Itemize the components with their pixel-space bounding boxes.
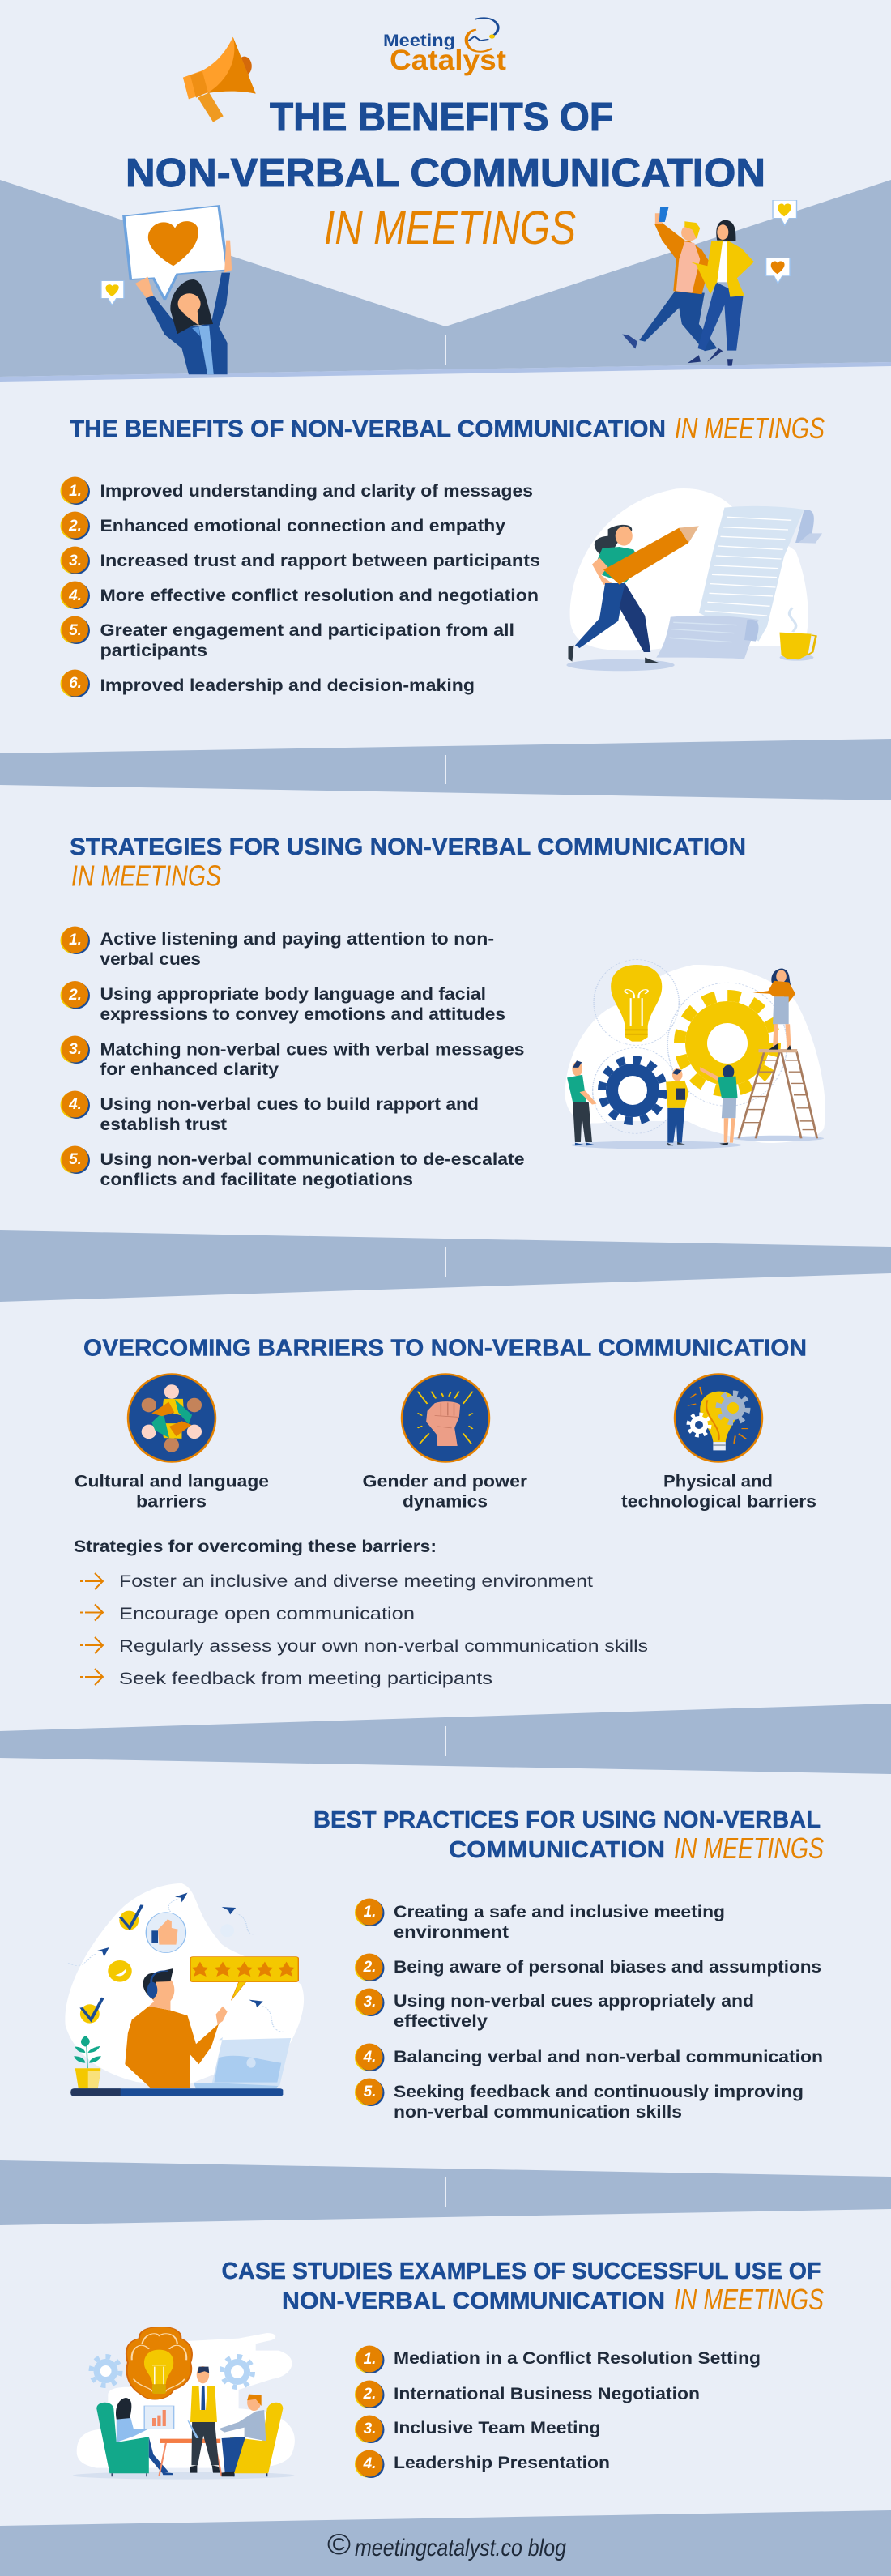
- heading: benefits: IN MEETINGS: [675, 412, 825, 445]
- divider band 2: [0, 1230, 891, 1302]
- list: best practices: effectively: [394, 2012, 488, 2031]
- panel: best practices: [65, 1807, 824, 2122]
- list: benefits: Enhanced emotional connection and empathy: [100, 517, 505, 535]
- illustration: team meeting with brain and bulb: [73, 2327, 295, 2480]
- list: case studies: 1.: [364, 2351, 376, 2368]
- list: benefits: 1.: [69, 483, 82, 500]
- heading: benefits: THE BENEFITS OF NON-VERBAL COMMUNICATION: [70, 416, 666, 442]
- list: case studies: Inclusive Team Meeting: [394, 2419, 601, 2437]
- heading: barriers: OVERCOMING BARRIERS TO NON-VERBAL COMMUNICATION: [83, 1335, 807, 1361]
- header band: [0, 180, 891, 382]
- list: benefits: Greater engagement and participation from all: [100, 621, 514, 640]
- list: strategies: Matching non-verbal cues with verbal messages: [100, 1040, 525, 1060]
- divider band 3: [0, 1704, 891, 1774]
- list: benefits: More effective conflict resolution and negotiation: [100, 586, 539, 605]
- list: strategies: establish trust: [100, 1115, 227, 1134]
- footer band: [0, 2510, 891, 2576]
- icon: yellow heart card: [773, 200, 797, 225]
- icon: small yellow heart card: [101, 281, 124, 305]
- heading: case studies: IN MEETINGS: [674, 2283, 824, 2316]
- list: strategies: Active listening and paying attention to non-: [100, 930, 494, 949]
- list: benefits: Increased trust and rapport between participants: [100, 552, 540, 570]
- list: benefits: Improved understanding and clarity of messages: [100, 482, 533, 501]
- heading: best practices: IN MEETINGS: [674, 1832, 824, 1865]
- panel: overcoming barriers: [74, 1335, 816, 1688]
- heading: case studies: [222, 2258, 824, 2316]
- title: [126, 96, 765, 254]
- footer credit: [327, 2527, 566, 2561]
- panel: benefits: [60, 412, 825, 697]
- list: benefits: 2.: [68, 518, 82, 535]
- list: overcoming strategies: [80, 1572, 648, 1688]
- list: benefits: [60, 476, 540, 697]
- heading: strategies: STRATEGIES FOR USING NON-VERBAL COMMUNICATION: [70, 834, 746, 860]
- heading: benefits: [70, 412, 825, 445]
- caption: physical and technological barriers: [621, 1473, 816, 1512]
- icon: orange heart card: [766, 258, 790, 284]
- icon: cultural and language barriers: [128, 1374, 215, 1461]
- heading: strategies: IN MEETINGS: [71, 859, 221, 893]
- list: strategies: 3.: [69, 1041, 82, 1058]
- divider band 1: [0, 739, 891, 800]
- heading: case studies: CASE STUDIES EXAMPLES OF SUCCESSFUL USE OF: [222, 2258, 821, 2284]
- list: best practices: 4.: [363, 2049, 376, 2066]
- illustration: woman with giant pencil and scroll: [566, 488, 822, 671]
- illustration: woman holding heart sign: [124, 206, 232, 374]
- list: best practices: 3.: [364, 1994, 376, 2011]
- title: IN MEETINGS: [324, 202, 576, 254]
- list: strategies: for enhanced clarity: [100, 1060, 279, 1079]
- panel: strategies: [60, 834, 825, 1189]
- list: benefits: 3.: [69, 552, 82, 569]
- list: best practices: [355, 1899, 823, 2122]
- list: best practices: Balancing verbal and non-verbal communication: [394, 2048, 823, 2066]
- caption: physical and technological barriers: technological barriers: [621, 1492, 816, 1512]
- caption: cultural and language barriers: Cultural and language: [75, 1473, 269, 1491]
- caption: gender and power dynamics: [363, 1473, 527, 1512]
- list: case studies: [355, 2346, 761, 2478]
- list: case studies: 3.: [364, 2420, 376, 2437]
- list: best practices: 2.: [363, 1959, 376, 1976]
- list: strategies: Using appropriate body language and facial: [100, 985, 486, 1004]
- heading: case studies: NON-VERBAL COMMUNICATION: [282, 2288, 665, 2314]
- list: case studies: 2.: [363, 2386, 376, 2403]
- list: strategies: [60, 927, 525, 1189]
- caption: physical and technological barriers: Physical and: [663, 1473, 773, 1491]
- list: best practices: 5.: [364, 2083, 376, 2100]
- title: NON-VERBAL COMMUNICATION: [126, 151, 765, 195]
- list: case studies: Mediation in a Conflict Resolution Setting: [394, 2349, 761, 2368]
- icon: physical and technological barriers: [675, 1374, 762, 1461]
- list: overcoming strategies: Regularly assess your own non-verbal communication skills: [119, 1637, 648, 1656]
- list: benefits: participants: [100, 642, 207, 660]
- list: strategies: 4.: [68, 1096, 82, 1113]
- illustration: couple taking selfie: [622, 207, 754, 366]
- list: overcoming strategies: Foster an inclusive and diverse meeting environment: [119, 1572, 593, 1591]
- footer credit: ©: [327, 2527, 351, 2561]
- list: strategies: 1.: [69, 932, 82, 949]
- caption: cultural and language barriers: [75, 1473, 269, 1512]
- divider band 4: [0, 2160, 891, 2225]
- list: overcoming strategies: Seek feedback from meeting participants: [119, 1670, 492, 1688]
- logo: Catalyst: [390, 45, 506, 76]
- heading: best practices: BEST PRACTICES FOR USING NON-VERBAL: [313, 1807, 821, 1833]
- list: strategies: Using non-verbal communication to de-escalate: [100, 1150, 525, 1169]
- icon: gender and power dynamics: [402, 1374, 489, 1461]
- list: strategies: 5.: [69, 1151, 82, 1168]
- list: best practices: Seeking feedback and continuously improving: [394, 2083, 804, 2101]
- list: benefits: 6.: [69, 675, 82, 692]
- icon: megaphone: [183, 37, 256, 122]
- logo: Meeting: [383, 32, 455, 50]
- heading: strategies: [70, 834, 746, 893]
- heading: best practices: [313, 1807, 824, 1865]
- list: strategies: Using non-verbal cues to build rapport and: [100, 1095, 479, 1114]
- title: THE BENEFITS OF: [270, 96, 613, 139]
- panel: case studies: [73, 2258, 824, 2480]
- list: best practices: Creating a safe and inclusive meeting: [394, 1903, 725, 1921]
- list: best practices: Using non-verbal cues appropriately and: [394, 1992, 754, 2011]
- list: case studies: Leadership Presentation: [394, 2454, 610, 2472]
- footer credit: meetingcatalyst.co blog: [355, 2535, 566, 2561]
- list: best practices: environment: [394, 1923, 509, 1942]
- caption: gender and power dynamics: dynamics: [403, 1492, 488, 1512]
- list: case studies: International Business Negotiation: [394, 2385, 700, 2403]
- list: strategies: verbal cues: [100, 950, 201, 969]
- illustration: gears, bulb and team: [565, 960, 825, 1149]
- list: best practices: non-verbal communication skills: [394, 2103, 682, 2122]
- caption: gender and power dynamics: Gender and power: [363, 1473, 527, 1491]
- list: overcoming strategies: Encourage open communication: [119, 1605, 415, 1623]
- list: strategies: expressions to convey emotions and attitudes: [100, 1005, 505, 1024]
- list: best practices: 1.: [364, 1904, 376, 1921]
- list: benefits: 4.: [68, 587, 82, 604]
- logo: [383, 18, 506, 76]
- list: strategies: 2.: [68, 987, 82, 1004]
- list: case studies: 4.: [363, 2455, 376, 2472]
- caption: cultural and language barriers: barriers: [136, 1492, 207, 1512]
- subheading: strategies for overcoming: Strategies for overcoming these barriers:: [74, 1537, 437, 1556]
- list: benefits: 5.: [69, 622, 82, 639]
- heading: best practices: COMMUNICATION: [449, 1837, 665, 1863]
- list: best practices: Being aware of personal biases and assumptions: [394, 1958, 821, 1977]
- list: benefits: Improved leadership and decision-making: [100, 676, 475, 695]
- illustration: man with headset and rating: [65, 1883, 304, 2096]
- list: strategies: conflicts and facilitate negotiations: [100, 1171, 413, 1189]
